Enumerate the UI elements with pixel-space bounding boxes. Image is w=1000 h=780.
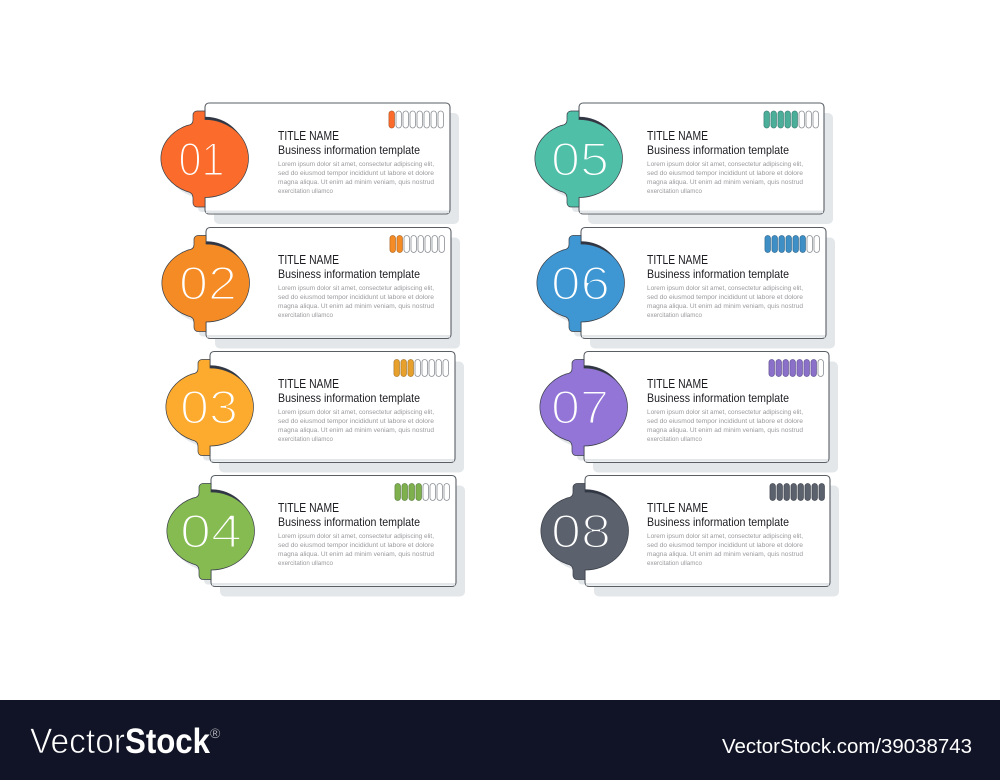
text block 06: TITLE NAME [647, 253, 708, 267]
panel: card 05 [535, 103, 833, 224]
text block 04 [278, 501, 434, 567]
number 02: 02 [179, 256, 237, 310]
text block 06: Business information template [647, 267, 789, 281]
number 04: 04 [180, 504, 242, 558]
progress indicator 4 of 8 [395, 484, 449, 500]
panel: card 02 [162, 228, 460, 348]
panel: card 03 [166, 352, 464, 472]
text block 08: sed do eiusmod tempor incididunt ut labore et dolore [647, 542, 803, 549]
text block 03: Business information template [278, 391, 420, 405]
progress indicator 8 of 8 [770, 484, 824, 500]
text block 06: Lorem ipsum dolor sit amet, consectetur adipiscing elit, [647, 285, 803, 292]
text block 07: sed do eiusmod tempor incididunt ut labore et dolore [647, 418, 803, 425]
text block 08: magna aliqua. Ut enim ad minim veniam, quis nostrud [647, 551, 803, 558]
number 08: 08 [551, 504, 611, 558]
text block 07: exercitation ullamco [647, 436, 702, 443]
text block 01 [278, 129, 434, 195]
text block 03: Lorem ipsum dolor sit amet, consectetur adipiscing elit, [278, 409, 434, 416]
text block 06 [647, 253, 803, 319]
text block 06: sed do eiusmod tempor incididunt ut labore et dolore [647, 294, 803, 301]
progress indicator 5 of 8 [764, 111, 818, 128]
number 07: 07 [551, 380, 609, 434]
text block 08: Business information template [647, 515, 789, 529]
text block 07: Business information template [647, 391, 789, 405]
text block 01: Business information template [278, 143, 420, 157]
text block 02: Business information template [278, 267, 420, 281]
text block 02: sed do eiusmod tempor incididunt ut labore et dolore [278, 294, 434, 301]
progress indicator 7 of 8 [769, 360, 823, 376]
image id: VectorStock.com/39038743 [722, 736, 972, 758]
text block 06: magna aliqua. Ut enim ad minim veniam, quis nostrud [647, 303, 803, 310]
panel: card 06 [537, 228, 835, 348]
logo wordmark [30, 722, 221, 761]
text block 04: Business information template [278, 515, 420, 529]
text block 08: exercitation ullamco [647, 560, 702, 567]
text block 05 [647, 129, 803, 195]
progress indicator 3 of 8 [394, 360, 448, 376]
logo wordmark: ® [210, 725, 221, 741]
text block 05: magna aliqua. Ut enim ad minim veniam, quis nostrud [647, 179, 803, 186]
text block 01: exercitation ullamco [278, 188, 333, 195]
text block 08: Lorem ipsum dolor sit amet, consectetur adipiscing elit, [647, 533, 803, 540]
text block 07: TITLE NAME [647, 377, 708, 391]
logo wordmark: Stock [125, 722, 210, 761]
panel: card 07 [540, 352, 838, 472]
text block 03: TITLE NAME [278, 377, 339, 391]
text block 05: exercitation ullamco [647, 188, 702, 195]
text block 01: Lorem ipsum dolor sit amet, consectetur adipiscing elit, [278, 161, 434, 168]
progress indicator 1 of 8 [389, 111, 443, 128]
panel: card 01 [161, 103, 459, 224]
text block 08: TITLE NAME [647, 501, 708, 515]
panel: card 04 [167, 476, 465, 596]
text block 04: TITLE NAME [278, 501, 339, 515]
number 06: 06 [551, 256, 610, 310]
text block 08 [647, 501, 803, 567]
text block 02 [278, 253, 434, 319]
text block 02: TITLE NAME [278, 253, 339, 267]
text block 04: magna aliqua. Ut enim ad minim veniam, quis nostrud [278, 551, 434, 558]
text block 03: sed do eiusmod tempor incididunt ut labore et dolore [278, 418, 434, 425]
footer bar [0, 700, 1000, 780]
text block 07: Lorem ipsum dolor sit amet, consectetur adipiscing elit, [647, 409, 803, 416]
text block 03 [278, 377, 434, 443]
logo wordmark: Vector [30, 722, 125, 761]
number 03: 03 [180, 380, 238, 434]
text block 01: sed do eiusmod tempor incididunt ut labore et dolore [278, 170, 434, 177]
panel: card 08 [541, 476, 839, 596]
text block 05: TITLE NAME [647, 129, 708, 143]
text block 07 [647, 377, 803, 443]
text block 05: Business information template [647, 143, 789, 157]
text block 04: sed do eiusmod tempor incididunt ut labore et dolore [278, 542, 434, 549]
number 05: 05 [551, 132, 609, 186]
progress indicator 6 of 8 [765, 236, 819, 252]
number 01: 01 [178, 132, 224, 186]
text block 06: exercitation ullamco [647, 312, 702, 319]
text block 05: Lorem ipsum dolor sit amet, consectetur adipiscing elit, [647, 161, 803, 168]
text block 04: exercitation ullamco [278, 560, 333, 567]
text block 03: exercitation ullamco [278, 436, 333, 443]
text block 01: TITLE NAME [278, 129, 339, 143]
text block 02: exercitation ullamco [278, 312, 333, 319]
text block 02: magna aliqua. Ut enim ad minim veniam, quis nostrud [278, 303, 434, 310]
text block 03: magna aliqua. Ut enim ad minim veniam, quis nostrud [278, 427, 434, 434]
text block 05: sed do eiusmod tempor incididunt ut labore et dolore [647, 170, 803, 177]
text block 02: Lorem ipsum dolor sit amet, consectetur adipiscing elit, [278, 285, 434, 292]
text block 04: Lorem ipsum dolor sit amet, consectetur adipiscing elit, [278, 533, 434, 540]
text block 07: magna aliqua. Ut enim ad minim veniam, quis nostrud [647, 427, 803, 434]
text block 01: magna aliqua. Ut enim ad minim veniam, quis nostrud [278, 179, 434, 186]
progress indicator 2 of 8 [390, 236, 444, 252]
